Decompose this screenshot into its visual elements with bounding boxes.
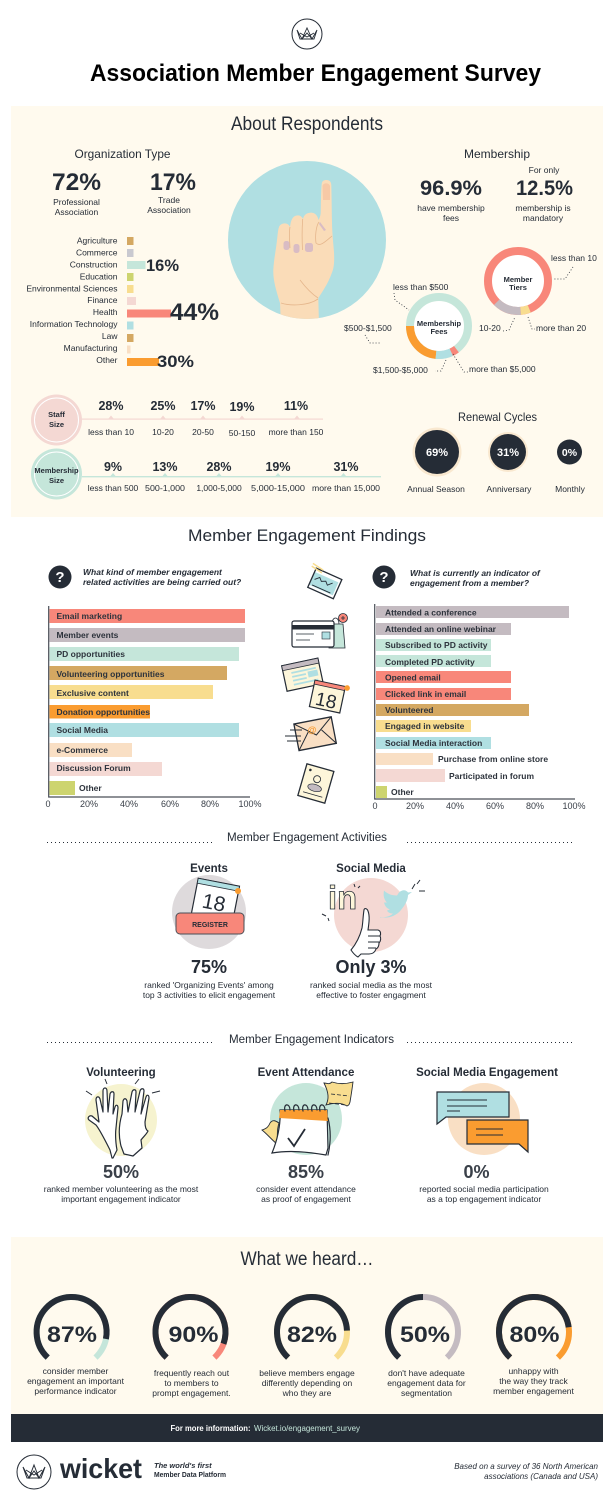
stat: 72% professional association: Professional (53, 197, 100, 207)
heading: member engagement activities: Member Engagement Activities (227, 832, 387, 844)
bar chart: organization sectors: Law (102, 331, 118, 341)
bar chart: indicators: Attended a conference (385, 608, 477, 618)
activity: social media: ranked social media as the most (310, 980, 433, 990)
bar chart: activities: 0 (45, 799, 51, 809)
gauge: 87% (22, 1283, 125, 1396)
indicator: volunteering: Volunteering (86, 1067, 156, 1079)
gauge: 82% (259, 1283, 361, 1398)
bar chart: activities: PD opportunities (56, 649, 125, 659)
bar chart: activities: e-Commerce (56, 745, 108, 755)
bar chart: organization sectors: Other (96, 355, 118, 365)
stat: 31% anniversary: 31% (497, 447, 519, 459)
footer logo: wicket: wicket (59, 1453, 142, 1484)
renewal cycles (407, 410, 586, 494)
gauge: 82%: differently depending on (262, 1378, 353, 1388)
indicator: volunteering: important engagement indicator (61, 1194, 181, 1204)
bar chart: organization sectors: Health (93, 307, 118, 317)
survey source note: associations (Canada and USA) (484, 1472, 598, 1481)
bar chart: organization sectors: 16% (146, 256, 179, 275)
gauge: 80%: the way they track (499, 1376, 568, 1386)
staff size scale: Size (49, 420, 64, 429)
bar chart: activities: 60% (161, 799, 179, 809)
bar chart: indicators: 80% (526, 801, 544, 811)
bar chart: organization sectors (26, 236, 219, 371)
bar chart: organization sectors: Construction (70, 260, 118, 270)
membership size scale: Membership (34, 466, 79, 475)
staff size scale (31, 394, 324, 446)
indicator: social media engagement: as a top engagement indicator (427, 1194, 541, 1204)
stat: 0% monthly: Monthly (555, 484, 586, 494)
bar chart: indicators: Social Media interaction (385, 738, 482, 748)
bar chart: indicators: Completed PD activity (385, 657, 475, 667)
bar chart: activities (45, 606, 262, 809)
stat: 17% trade association (147, 169, 196, 215)
bar chart: organization sectors: Finance (87, 295, 118, 305)
heading: organization type: Organization Type (74, 147, 171, 161)
icon: calendar with check mark (262, 1082, 353, 1155)
bar chart: indicators: Opened email (385, 672, 441, 682)
activity: social media: effective to foster engagment (316, 990, 426, 1000)
donut: member tiers: 10-20 (479, 323, 501, 333)
bar chart: indicators: Other (391, 787, 414, 797)
staff size scale: 19% (229, 400, 255, 414)
bar chart: activities: Donation opportunities (56, 707, 150, 717)
staff size scale: Staff (48, 410, 65, 419)
gauge: 82%: believe members engage (259, 1368, 355, 1378)
staff size scale: 20-50 (192, 427, 214, 437)
donut: membership fees (344, 282, 536, 375)
bar chart: indicators: Volunteered (385, 705, 434, 715)
bar chart: activities: Email marketing (56, 611, 122, 621)
stat: 17% trade association: Association (147, 205, 191, 215)
heading: member engagement indicators: Member Engagement Indicators (229, 1034, 394, 1046)
icon: calendar page 18 (309, 678, 350, 716)
icon: email envelope: @ (308, 725, 317, 735)
footer logo: wicket (17, 1453, 142, 1489)
bar chart: activities: Social Media (56, 725, 108, 735)
bar chart: organization sectors: Education (80, 272, 118, 282)
indicator: volunteering (44, 1067, 199, 1204)
bar chart: indicators: Attended an online webinar (385, 624, 497, 634)
bar chart: activities: 40% (120, 799, 138, 809)
survey source note: Based on a survey of 36 North American (454, 1462, 599, 1471)
bar chart: indicators: 20% (406, 801, 424, 811)
stat: 69% annual season: 69% (426, 447, 448, 459)
stat: 0% monthly (555, 440, 586, 494)
panel: what we heard (11, 1237, 603, 1414)
indicator: social media engagement: Social Media Engagement (416, 1067, 558, 1079)
stat: 17% trade association: Trade (158, 195, 180, 205)
gauge: 90%: 90% (168, 1322, 218, 1347)
hand illustration in blue circle (228, 161, 386, 325)
donut: membership fees: more than $5,000 (469, 364, 536, 374)
question: indicator: engagement from a member? (410, 578, 530, 588)
membership size scale: 31% (333, 460, 359, 474)
stat: 96.9% have membership fees: 96.9% (420, 177, 482, 200)
membership size scale: 5,000-15,000 (251, 483, 305, 493)
question: activities (48, 566, 242, 588)
bar chart: indicators: Subscribed to PD activity (385, 640, 488, 650)
gauge: 50% (374, 1283, 472, 1398)
question: activities: What kind of member engagement (83, 567, 223, 577)
activity: social media: Social Media (336, 863, 406, 875)
stat: 72% professional association: Association (55, 207, 99, 217)
question: indicator: ? (379, 569, 389, 586)
indicator: volunteering: 50% (103, 1162, 139, 1182)
membership size scale: 500-1,000 (145, 483, 185, 493)
gauge: 50%: segmentation (401, 1388, 452, 1398)
membership block (344, 147, 597, 375)
gauge: 82%: who they are (282, 1388, 332, 1398)
footer tagline: The world's first (154, 1461, 212, 1470)
question: indicator: What is currently an indicator of (410, 568, 541, 578)
stat: 31% anniversary (487, 432, 532, 494)
heading: member engagement findings: Member Engagement Findings (188, 526, 426, 545)
bar chart: indicators: Clicked link in email (385, 689, 466, 699)
indicator: event attendance: as proof of engagement (261, 1194, 352, 1204)
icon: calendar with register button: 18 (200, 890, 227, 917)
indicator: event attendance: consider event attendance (256, 1184, 356, 1194)
bar chart: indicators: 60% (486, 801, 504, 811)
membership size scale: Size (49, 476, 64, 485)
staff size scale: 50-150 (229, 428, 256, 438)
footer bar: more information (11, 1414, 603, 1442)
footer tagline (154, 1461, 226, 1479)
icon: calendar page 18: 18 (313, 689, 338, 714)
donut: membership fees: Membership (417, 319, 462, 328)
bar chart: indicators: Purchase from online store (438, 754, 548, 764)
organization type block (26, 147, 219, 371)
bar chart: indicators: 0 (372, 801, 378, 811)
stat: 69% annual season (407, 428, 465, 494)
membership size scale: 13% (152, 460, 178, 474)
stat: 31% anniversary: Anniversary (487, 484, 532, 494)
bar chart: activities: Other (79, 783, 102, 793)
icon: high five hands (85, 1079, 160, 1158)
question: activities: ? (55, 569, 65, 586)
gauge: 90%: prompt engagement. (152, 1388, 231, 1398)
activity: events: ranked 'Organizing Events' among (144, 980, 274, 990)
bar chart: organization sectors: Environmental Sciences (26, 284, 118, 294)
bar chart: activities: Discussion Forum (56, 763, 131, 773)
gauge: 80%: unhappy with (508, 1366, 559, 1376)
icon: linkedin, twitter and thumbs up: in (328, 879, 357, 916)
footer tagline: Member Data Platform (154, 1470, 226, 1479)
stat: 96.9% have membership fees: fees (443, 213, 459, 223)
bar chart: indicators: Participated in forum (449, 771, 534, 781)
footer bar: more information: Wicket.io/engagement_survey (254, 1424, 360, 1433)
stat: 72% professional association: 72% (52, 169, 101, 196)
heading: about respondents: About Respondents (231, 114, 383, 135)
activity: events: top 3 activities to elicit engagement (143, 990, 276, 1000)
icon: calendar with register button (172, 875, 246, 949)
indicator: event attendance: 85% (288, 1162, 324, 1182)
donut: member tiers: more than 20 (536, 323, 586, 333)
indicator: social media engagement: 0% (463, 1162, 490, 1182)
membership size scale: less than 500 (88, 483, 139, 493)
icon: chat bubbles (437, 1083, 528, 1155)
staff size scale: 25% (150, 399, 176, 413)
staff size scale: 28% (98, 399, 124, 413)
activity: events: 75% (191, 957, 227, 977)
panel: about respondents (11, 106, 603, 517)
staff size scale: 17% (190, 399, 216, 413)
stat: 12.5% membership is mandatory: For only (529, 165, 560, 175)
bar chart: organization sectors: 30% (157, 352, 194, 371)
donut: member tiers: Member (504, 275, 532, 284)
stat: 72% professional association (52, 169, 101, 217)
activity: events (143, 863, 276, 1000)
stat: 12.5% membership is mandatory: membership is (515, 203, 571, 213)
membership size scale: more than 15,000 (312, 483, 380, 493)
icon: email envelope (285, 717, 336, 751)
gauge: 87%: consider member (43, 1366, 108, 1376)
indicator: volunteering: ranked member volunteering as the most (44, 1184, 199, 1194)
title: Association Member Engagement Survey (90, 60, 542, 87)
stat: 12.5% membership is mandatory: mandatory (523, 213, 564, 223)
activity: events: Events (190, 863, 228, 875)
stat: 12.5% membership is mandatory (515, 165, 573, 223)
donut: membership fees: Fees (430, 327, 448, 336)
indicator: social media engagement: reported social media participation (419, 1184, 549, 1194)
icon: credit card with shopping bag (292, 614, 348, 648)
membership size scale (31, 448, 381, 500)
stat: 12.5% membership is mandatory: 12.5% (516, 177, 573, 200)
gauge: 50%: 50% (400, 1322, 450, 1347)
bar chart: organization sectors: 44% (170, 299, 219, 326)
donut: membership fees: $500-$1,500 (344, 323, 392, 333)
bar chart: organization sectors: Commerce (76, 248, 118, 258)
gauge: 80% (485, 1283, 583, 1396)
gauge: 80%: member engagement (493, 1386, 575, 1396)
icon: wicket logo (292, 19, 322, 49)
indicator: social media engagement (416, 1067, 558, 1204)
gauge: 90%: frequently reach out (154, 1368, 230, 1378)
bar chart: activities: 100% (238, 799, 262, 809)
bar chart: indicators: Engaged in website (385, 721, 465, 731)
activity: social media: Only 3% (335, 957, 407, 977)
bar chart: indicators: 40% (446, 801, 464, 811)
gauge: 90%: to members to (164, 1378, 219, 1388)
gauge: 87%: engagement an important (27, 1376, 125, 1386)
bar chart: activities: 20% (80, 799, 98, 809)
staff size scale: less than 10 (88, 427, 134, 437)
bar chart: indicators (372, 604, 586, 811)
icon: profile card (298, 764, 334, 803)
survey source note (454, 1462, 599, 1481)
staff size scale: 11% (284, 399, 308, 413)
donut: membership fees: $1,500-$5,000 (373, 365, 428, 375)
bar chart: activities: Volunteering opportunities (56, 669, 165, 679)
question: activities: related activities are being carried out? (83, 577, 242, 587)
bar chart: organization sectors: Agriculture (77, 236, 118, 246)
icon: calendar with register button: REGISTER (192, 922, 228, 929)
donut: member tiers: Tiers (509, 283, 527, 292)
bar chart: organization sectors: Information Technology (30, 319, 118, 329)
membership size scale: 1,000-5,000 (196, 483, 242, 493)
bar chart: activities: Exclusive content (56, 688, 129, 698)
membership size scale: 19% (265, 460, 291, 474)
donut: member tiers (479, 242, 597, 333)
donut: member tiers: less than 10 (551, 253, 597, 263)
question: indicator (372, 566, 541, 588)
heading: renewal cycles: Renewal Cycles (458, 410, 537, 424)
gauge: 87%: 87% (47, 1322, 97, 1347)
icon: chart card (303, 563, 343, 599)
membership size scale: 9% (104, 460, 122, 474)
gauge: 50%: engagement data for (387, 1378, 466, 1388)
gauge: 82%: 82% (287, 1322, 337, 1347)
indicator: event attendance: Event Attendance (258, 1067, 354, 1079)
donut: membership fees: less than $500 (393, 282, 449, 292)
membership size scale: 28% (206, 460, 232, 474)
gauge: 87%: performance indicator (34, 1386, 117, 1396)
bar chart: activities: Member events (56, 630, 119, 640)
bar chart: organization sectors: Manufacturing (64, 343, 118, 353)
heading: membership: Membership (464, 147, 530, 161)
gauge: 80%: 80% (510, 1322, 560, 1347)
icon: browser window (282, 658, 323, 691)
footer bar: more information: For more information: (170, 1424, 250, 1433)
stat: 17% trade association: 17% (150, 169, 196, 196)
gauge: 90% (141, 1283, 240, 1398)
gauge: 50%: don't have adequate (388, 1368, 465, 1378)
staff size scale: 10-20 (152, 427, 174, 437)
stat: 96.9% have membership fees: have membership (417, 203, 485, 213)
bar chart: indicators: 100% (562, 801, 586, 811)
staff size scale: more than 150 (269, 427, 324, 437)
activity: social media (310, 863, 433, 1000)
bar chart: activities: 80% (201, 799, 219, 809)
indicator: event attendance (256, 1067, 356, 1204)
stat: 96.9% have membership fees (417, 177, 485, 223)
stat: 0% monthly: 0% (562, 447, 578, 459)
stat: 69% annual season: Annual Season (407, 484, 465, 494)
heading: what we heard: What we heard… (240, 1249, 374, 1270)
